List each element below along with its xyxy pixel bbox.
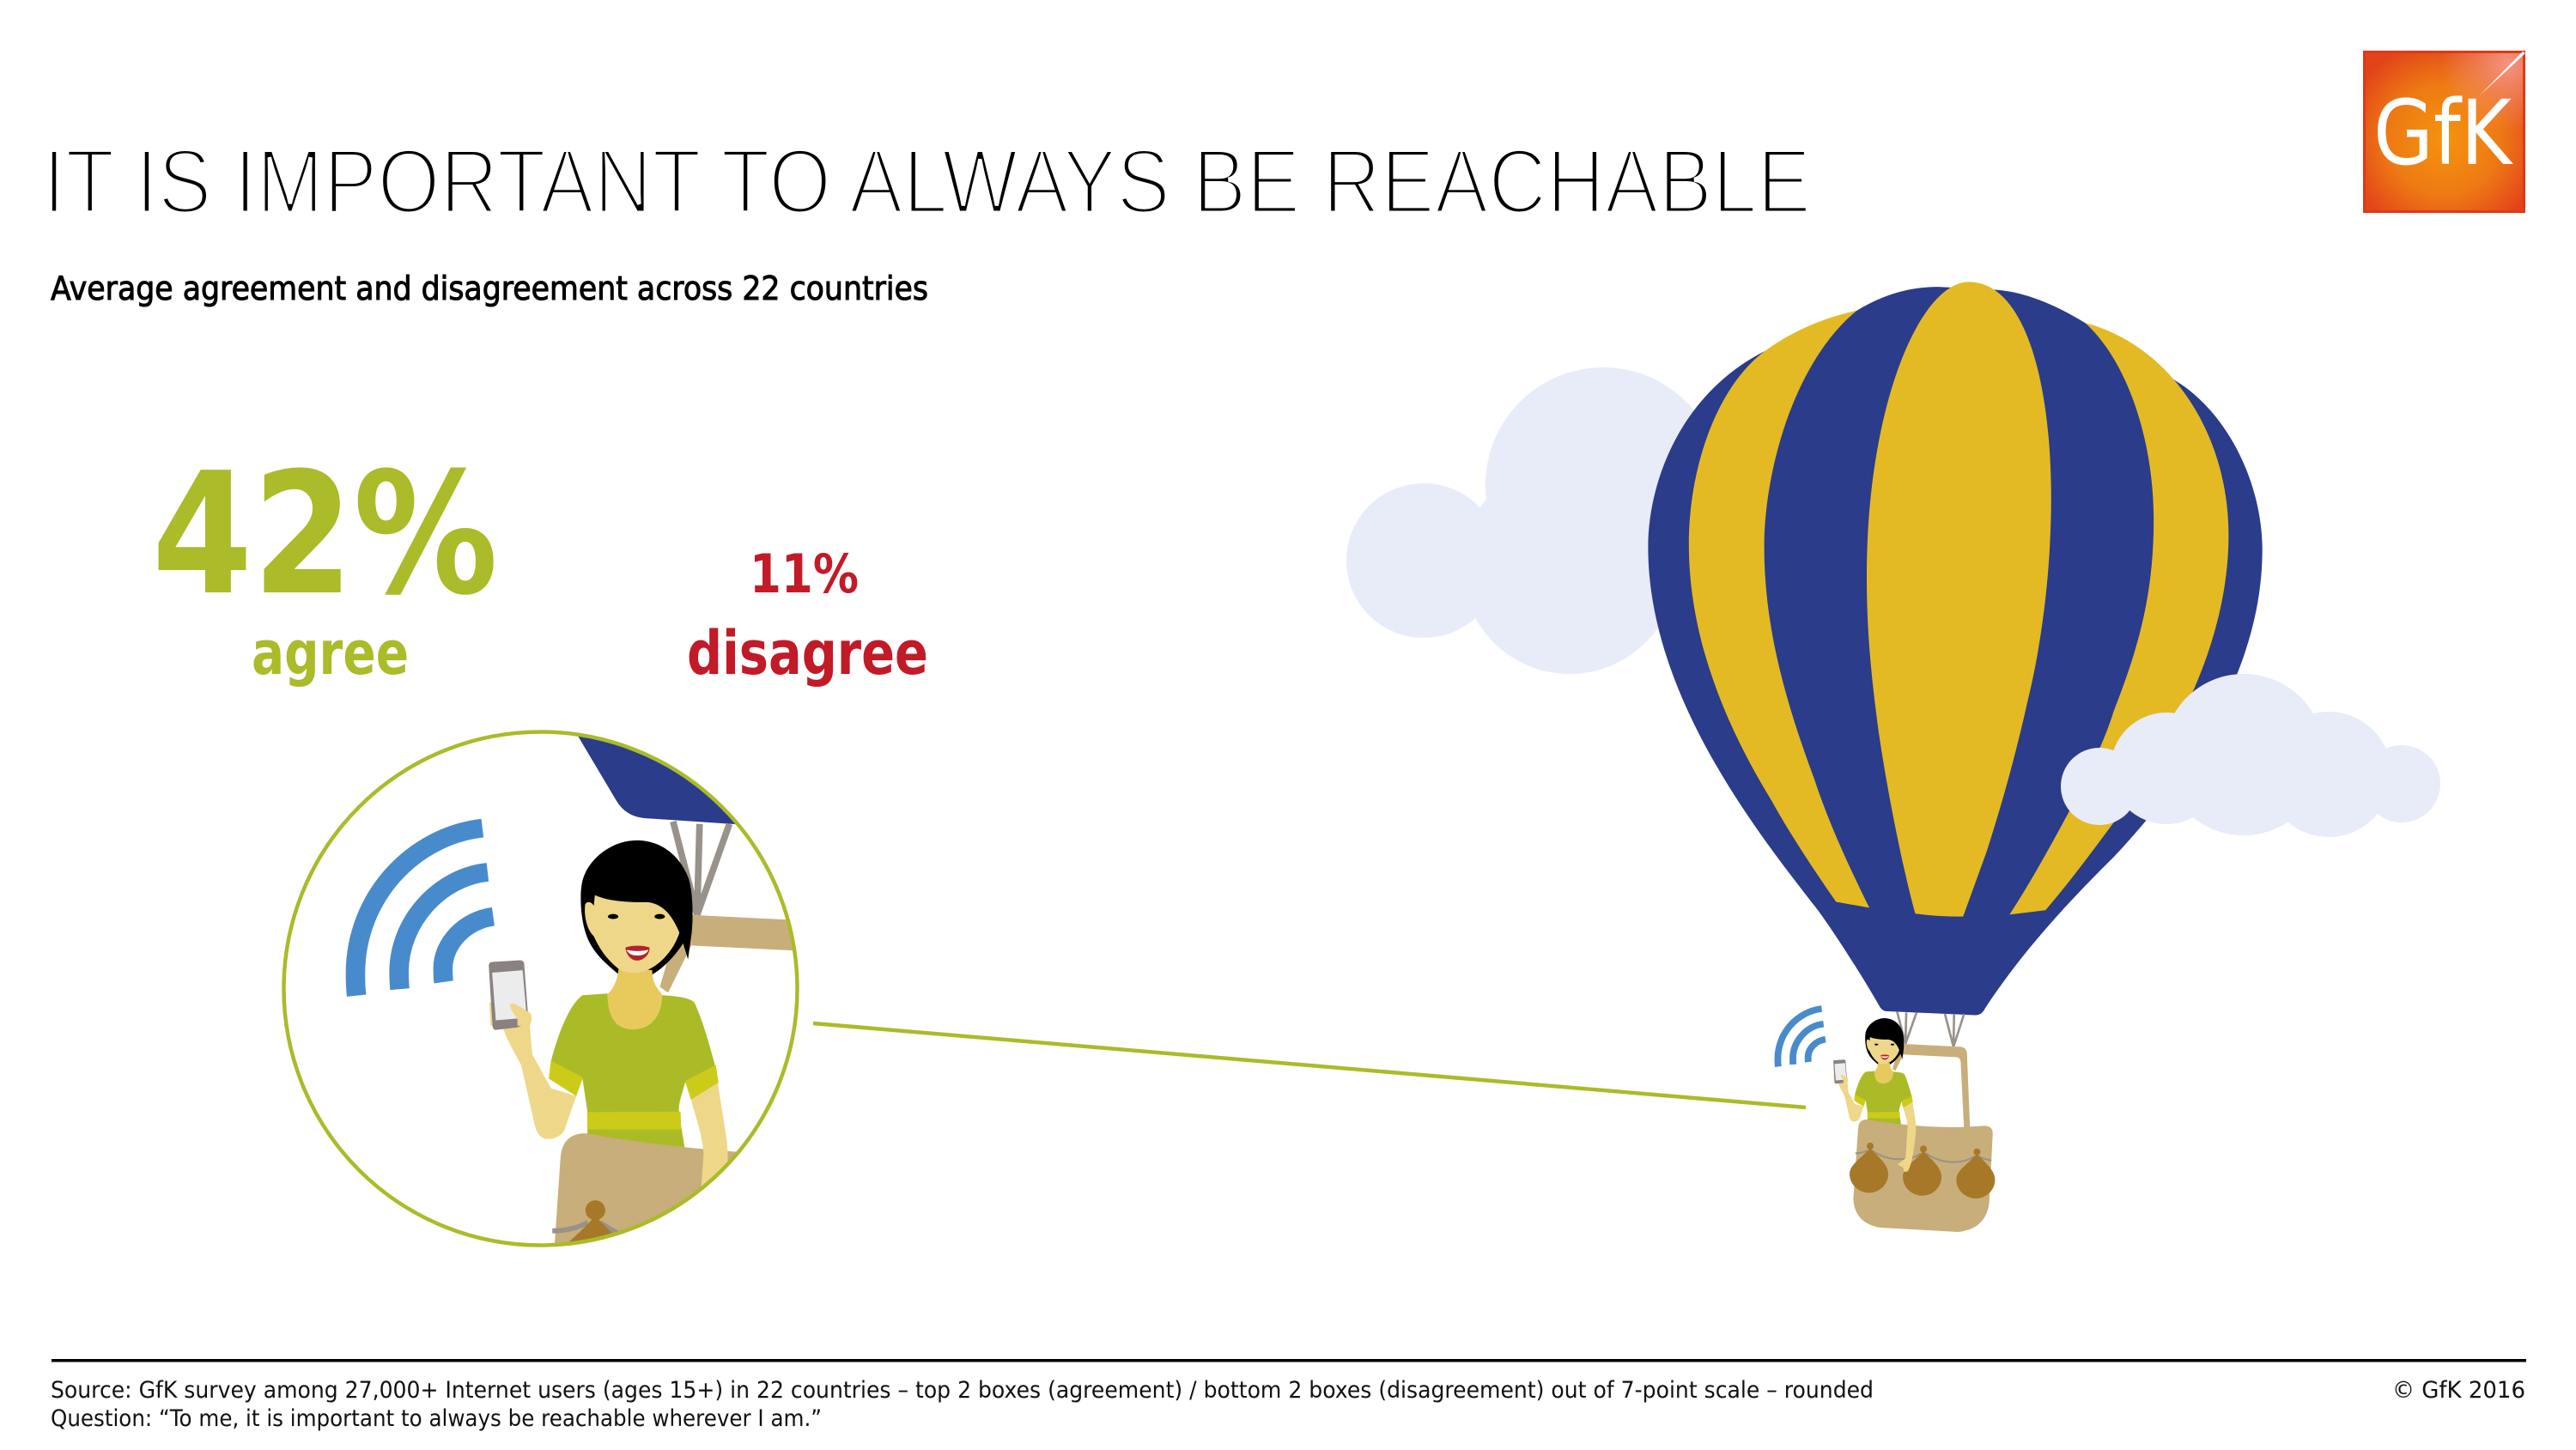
small lady in basket under balloon [1777,1009,1995,1232]
stat: 42% agree: 42% [152,437,498,633]
subtitle: Average agreement and disagreement across 22 countries [51,270,928,307]
hot air balloon [1648,282,2263,1015]
source note: Question: “To me, it is important to always be reachable wherever I am.” [51,1405,822,1432]
cloud behind balloon [1346,367,1721,674]
footer rule [52,1359,2526,1362]
basket frame [659,915,793,992]
woman with phone [489,840,719,1155]
connector line [813,1023,1806,1107]
stat: 11% disagree: disagree [687,618,928,689]
source note [51,1377,1874,1432]
copyright: © GfK 2016 [2392,1377,2525,1404]
logo: GfK [2363,51,2525,213]
logo: GfK: GfK [2373,81,2513,185]
title: IT IS IMPORTANT TO ALWAYS BE REACHABLE [43,130,1811,233]
cloud in front of balloon [2061,674,2440,837]
woman's arm [690,1083,728,1186]
balloon bottom [577,735,741,825]
source note: Source: GfK survey among 27,000+ Internet users (ages 15+) in 22 countries – top 2 boxes (agreement) / bottom 2 boxes (disagreement) out of 7-point scale – rounded [51,1377,1874,1404]
stat: 42% agree: agree [252,618,409,689]
basket [555,1133,737,1243]
stat: 42% agree [152,437,498,689]
balloon cords [670,821,732,915]
sandbags [552,1200,619,1241]
panel: magnified circle [282,730,799,1247]
icon: wifi signal [355,828,493,996]
stat: 11% disagree [687,543,928,689]
stat: 11% disagree: 11% [750,543,859,605]
